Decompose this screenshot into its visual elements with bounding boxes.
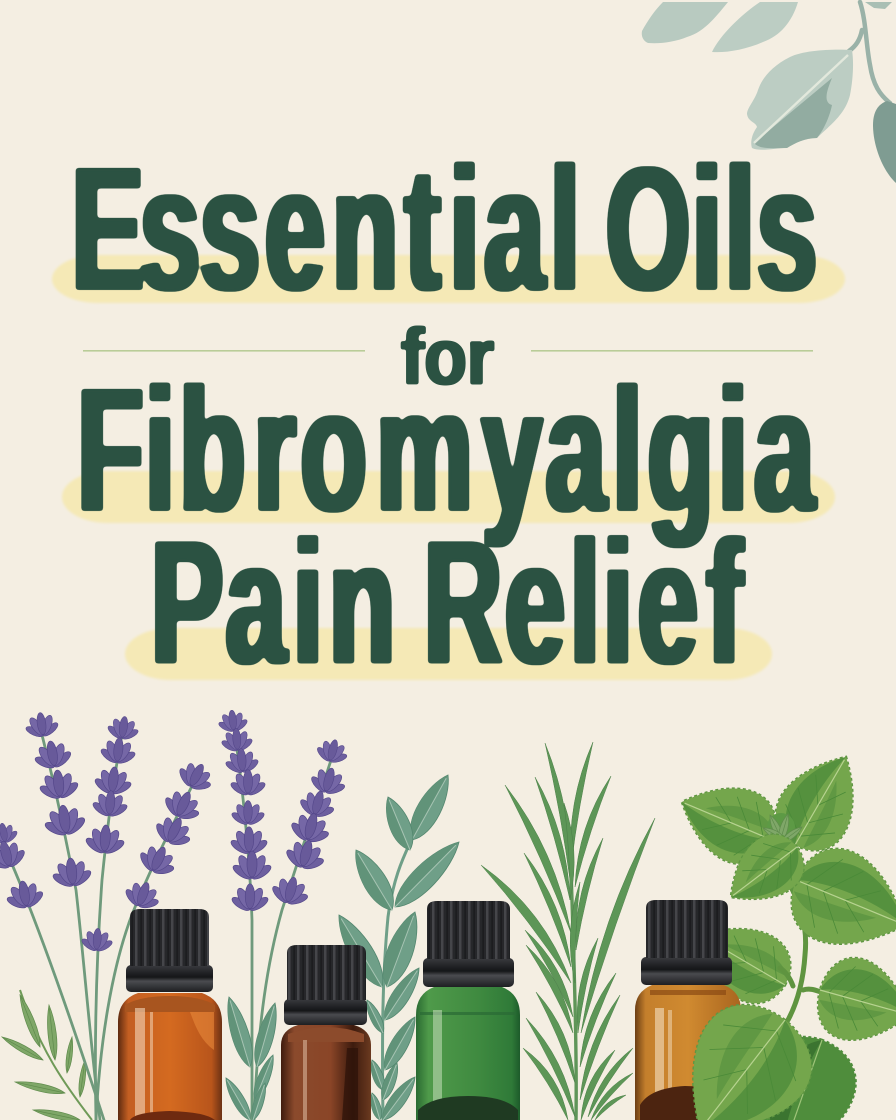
rosemary sprig — [481, 741, 655, 1120]
bottle: amber — [635, 900, 741, 1120]
mint bud — [761, 813, 804, 845]
mint leaf: lower right dark — [735, 1024, 867, 1120]
mint plant — [654, 739, 896, 1120]
mint leaf behind amber bottle — [682, 905, 803, 1015]
mint stems — [780, 863, 821, 1020]
title — [71, 131, 817, 701]
stem — [849, 2, 890, 103]
bottle: green — [416, 901, 520, 1120]
leaf: main — [747, 50, 853, 150]
lavender spike F — [267, 736, 352, 911]
mint leaf: large lower — [654, 984, 831, 1120]
mint leaf: top left — [668, 768, 786, 874]
leaf: far left — [642, 2, 728, 43]
bottle: brown — [281, 945, 371, 1120]
title line: Essential Oils: Essential Oils — [71, 131, 817, 328]
sage sprig — [329, 769, 467, 1120]
divider left — [83, 350, 365, 352]
lavender spike E — [216, 709, 273, 913]
title line: for: for — [401, 312, 494, 401]
leaves at base of lavender E — [221, 995, 283, 1120]
mint leaf: centre — [713, 823, 815, 921]
title line: Fibromyalgia: Fibromyalgia — [77, 352, 816, 549]
highlight: line one — [52, 255, 845, 303]
bottle: orange — [118, 909, 222, 1120]
cap — [427, 901, 510, 959]
mint leaf: right upper — [778, 836, 896, 969]
cap — [130, 909, 209, 966]
lavender plants — [0, 709, 352, 1120]
divider right — [531, 350, 813, 352]
collar — [641, 957, 732, 985]
lavender spike D — [0, 821, 47, 913]
highlight: line two — [62, 471, 835, 523]
leaf: top corner — [865, 2, 892, 9]
lavender spike B — [79, 714, 142, 954]
collar — [284, 999, 367, 1025]
cap — [287, 945, 366, 1000]
cap — [646, 900, 728, 958]
collar — [126, 965, 213, 992]
title line: Pain Relief: Pain Relief — [151, 504, 744, 701]
body — [281, 1025, 371, 1120]
small olive herb, lower left — [0, 990, 92, 1120]
watercolor leaves, top right — [642, 2, 896, 183]
highlight: line three — [125, 628, 772, 680]
leaf: second — [712, 2, 798, 52]
body — [416, 987, 520, 1120]
lavender stems — [8, 735, 332, 1120]
body — [118, 993, 222, 1120]
body — [635, 985, 741, 1120]
collar — [423, 958, 514, 987]
lavender spike C — [120, 756, 219, 915]
mint leaf: top right — [763, 739, 878, 863]
leaf: right edge — [873, 101, 896, 183]
mint leaf: right lower — [809, 950, 896, 1055]
lavender spike A — [22, 710, 94, 891]
